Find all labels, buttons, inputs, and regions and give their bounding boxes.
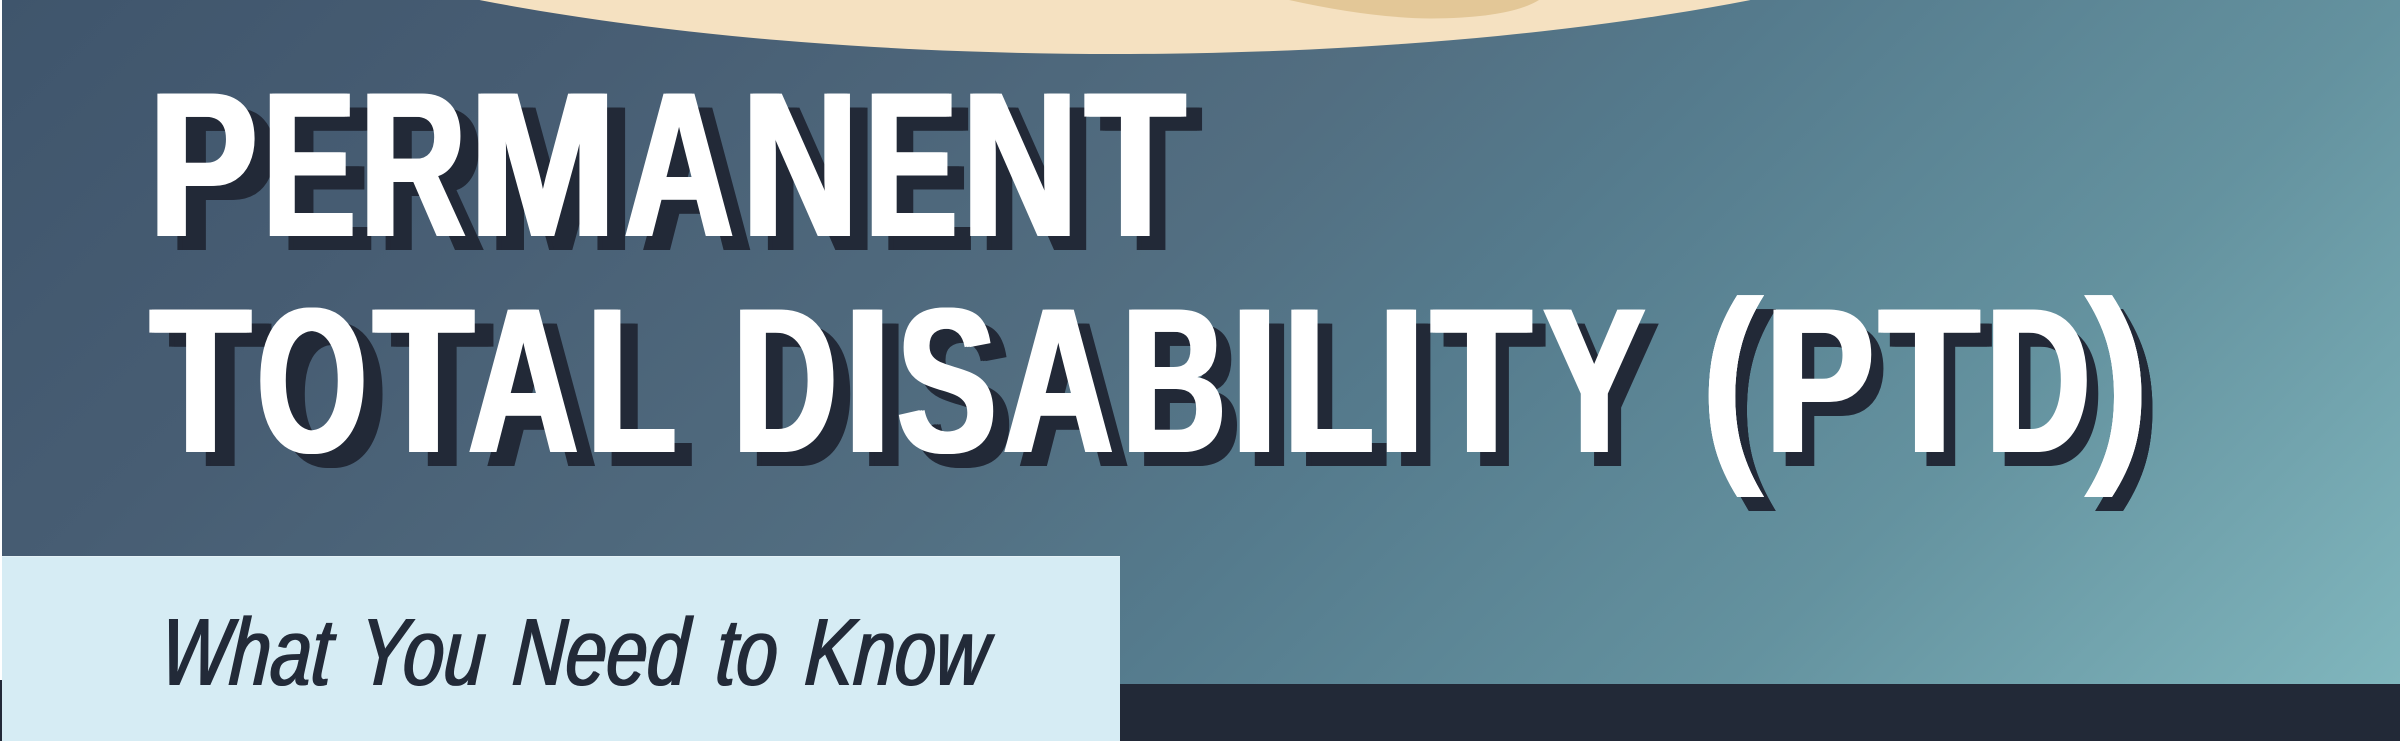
title line 1: P	[149, 49, 258, 280]
title line 1: N	[742, 49, 858, 280]
shaded chin area	[1289, 0, 1539, 18]
dark left edge	[0, 680, 2, 741]
title line 2: P	[1764, 264, 1874, 496]
title line 2: T	[150, 264, 251, 496]
title line 1: M	[469, 49, 616, 280]
dark footer band	[0, 684, 2400, 741]
title line 1: R	[360, 49, 466, 280]
title: Permanent Total Disability (PTD)	[149, 49, 2152, 511]
title line 1: N	[962, 49, 1078, 280]
title line 2: I	[1231, 264, 1278, 496]
title line 2: L	[1284, 264, 1374, 496]
title line 2: B	[1122, 264, 1226, 496]
title line 1: E	[865, 49, 957, 280]
title line 2: D	[733, 264, 837, 496]
title line 2: T	[373, 264, 474, 496]
title line 2: T	[1879, 264, 1979, 496]
title line 2: I	[1378, 264, 1425, 496]
title line 2: D	[1986, 264, 2091, 496]
illustration: cropped skin-tone head shape	[480, 0, 1750, 54]
subtitle text: What You Need to Know	[158, 599, 997, 706]
title line 1: E	[262, 49, 355, 280]
title line 1: T	[1085, 49, 1185, 280]
head ellipse	[115, 0, 2115, 54]
title line 2: A	[1002, 264, 1113, 496]
title line 1	[149, 49, 1202, 280]
panel: subtitle	[2, 556, 1120, 741]
title line 1: A	[624, 49, 734, 280]
title line 2: A	[468, 264, 578, 496]
title line 2: (	[1699, 256, 1764, 497]
title line 2: Y	[1543, 264, 1645, 496]
title line 2: )	[2084, 256, 2151, 497]
title line 2: T	[1431, 264, 1532, 496]
title line 2: L	[587, 264, 677, 496]
title line 2: O	[257, 264, 367, 496]
title line 2: S	[896, 264, 996, 496]
title line 2: I	[844, 264, 891, 496]
title line 2	[149, 256, 2152, 511]
